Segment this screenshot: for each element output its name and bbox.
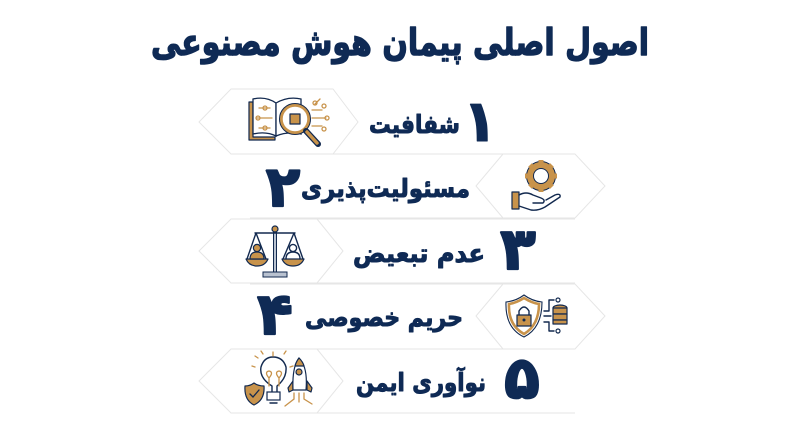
label: privacy: حریم خصوصی — [305, 303, 463, 333]
panel: row 4 privacy — [250, 280, 605, 349]
number 4: ۴ — [257, 280, 293, 348]
label: transparency: شفافیت — [369, 110, 460, 139]
label: non-discrimination: عدم تبعیض — [353, 239, 485, 268]
panel: row 3 non-discrimination — [199, 215, 575, 283]
icon: hand holding gear — [512, 160, 560, 210]
number 3: ۳ — [500, 215, 536, 283]
number 1: ۱ — [462, 87, 498, 155]
icon: shield with lock and database — [506, 295, 567, 337]
panel: row 2 responsibility — [250, 154, 605, 220]
panel: row 1 transparency — [199, 87, 498, 155]
icon: book with AI chip and magnifier — [249, 98, 329, 144]
label: responsibility: مسئولیت‌پذیری — [301, 174, 470, 204]
label: safe innovation: نوآوری ایمن — [356, 367, 486, 398]
icon: scales of justice with people — [246, 226, 304, 277]
number 2: ۲ — [266, 155, 300, 220]
panel: row 5 safe innovation — [199, 344, 575, 413]
title: اصول اصلی پیمان هوش مصنوعی — [151, 21, 649, 64]
icon: shield, lightbulb and rocket — [245, 351, 312, 406]
number 5: ۵ — [504, 344, 540, 412]
